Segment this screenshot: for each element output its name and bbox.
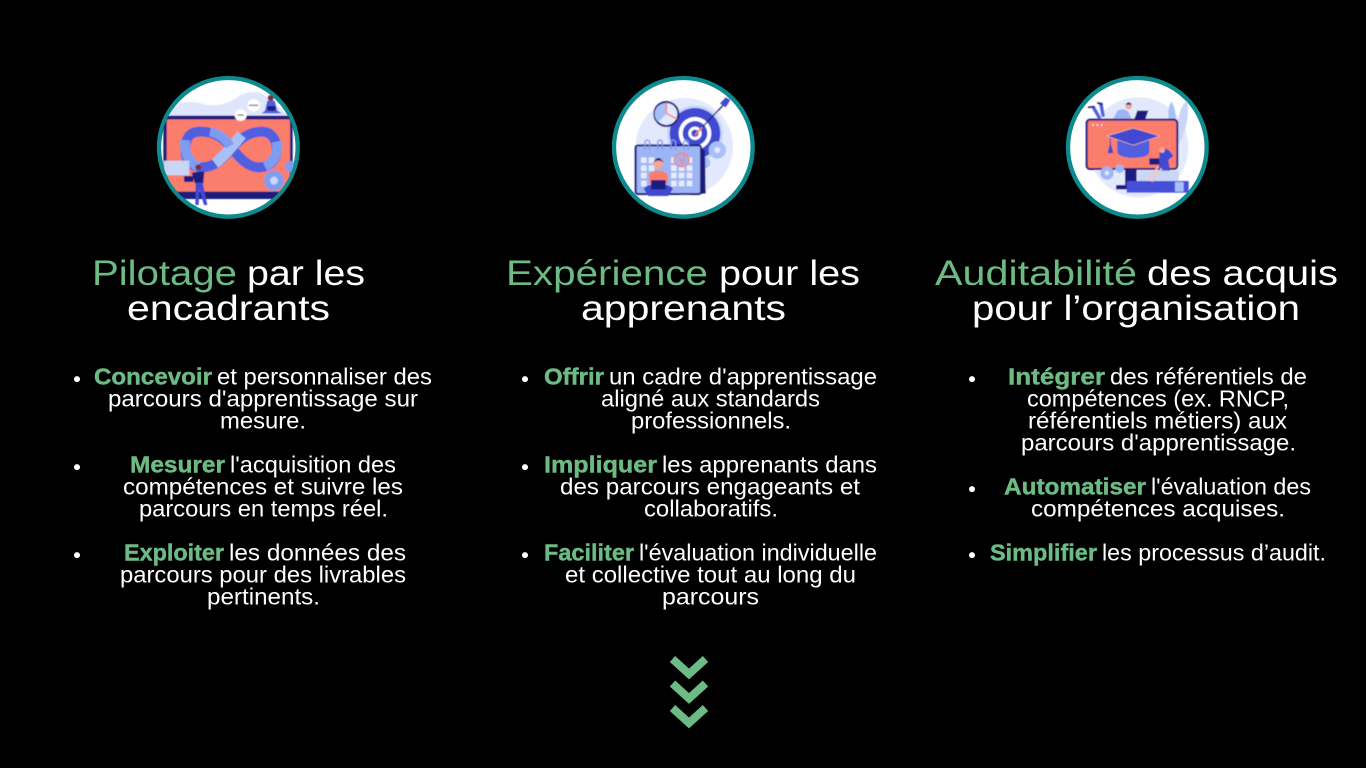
list: expérience pour les apprenants: Impliquer	[544, 452, 657, 478]
heading: Auditabilité des acquis pour l'organisation	[935, 254, 1338, 328]
heading: Expérience pour les apprenants: pour les	[719, 254, 860, 293]
list: expérience pour les apprenants: un cadre d'apprentissage	[609, 364, 877, 390]
list: expérience pour les apprenants: les apprenants dans	[662, 452, 877, 478]
list: auditabilité des acquis: les processus d’audit.	[1102, 540, 1326, 566]
list: auditabilité des acquis: compétences (ex. RNCP,	[1027, 386, 1289, 412]
heading: Expérience pour les apprenants: Expérience	[506, 254, 708, 293]
list: auditabilité des acquis: des référentiels de	[1110, 364, 1307, 390]
list: pilotage par les encadrants: parcours pour des livrables	[120, 562, 406, 588]
list: pilotage par les encadrants: et personnaliser des	[217, 364, 432, 390]
heading: Pilotage par les encadrants: par les	[247, 254, 365, 293]
list: pilotage par les encadrants: Mesurer	[130, 452, 225, 478]
list: expérience pour les apprenants: des parcours engageants et	[560, 474, 860, 500]
list: auditabilité des acquis	[969, 364, 1326, 566]
heading: Pilotage par les encadrants: encadrants	[127, 289, 330, 328]
list: expérience pour les apprenants	[522, 364, 877, 610]
list: pilotage par les encadrants	[74, 364, 432, 610]
list: auditabilité des acquis: parcours d'apprentissage.	[1021, 430, 1296, 456]
icon: calendar and target	[614, 78, 753, 217]
list: expérience pour les apprenants: parcours	[662, 584, 759, 610]
heading: Pilotage par les encadrants	[92, 254, 365, 328]
heading: Expérience pour les apprenants: apprenants	[581, 289, 786, 328]
heading: Pilotage par les encadrants: Pilotage	[92, 254, 237, 293]
list: pilotage par les encadrants: parcours d'apprentissage sur	[108, 386, 418, 412]
heading: Auditabilité des acquis pour l'organisation: Auditabilité	[935, 254, 1137, 293]
arrow: triple chevron down	[672, 659, 706, 723]
heading: Auditabilité des acquis pour l'organisation: des acquis	[1147, 254, 1338, 293]
list: expérience pour les apprenants: professionnels.	[631, 408, 791, 434]
list: expérience pour les apprenants: collaboratifs.	[644, 496, 778, 522]
list: expérience pour les apprenants: Faciliter	[544, 540, 634, 566]
list: pilotage par les encadrants: compétences et suivre les	[123, 474, 403, 500]
list: expérience pour les apprenants: et collective tout au long du	[565, 562, 856, 588]
list: auditabilité des acquis: référentiels métiers) aux	[1028, 408, 1287, 434]
list: pilotage par les encadrants: Concevoir	[94, 364, 212, 390]
list: auditabilité des acquis: Simplifier	[990, 540, 1097, 566]
heading: Auditabilité des acquis pour l'organisation: pour l’organisation	[972, 289, 1300, 328]
list: expérience pour les apprenants: Offrir	[544, 364, 604, 390]
icon: graduation cap on a monitor	[1068, 78, 1207, 217]
list: expérience pour les apprenants: aligné aux standards	[601, 386, 820, 412]
list: pilotage par les encadrants: Exploiter	[124, 540, 224, 566]
list: pilotage par les encadrants: mesure.	[220, 408, 306, 434]
list: expérience pour les apprenants: l'évaluation individuelle	[639, 540, 877, 566]
list: auditabilité des acquis: l'évaluation des	[1151, 474, 1311, 500]
list: auditabilité des acquis: Intégrer	[1008, 364, 1105, 390]
list: auditabilité des acquis: compétences acquises.	[1031, 496, 1285, 522]
list: pilotage par les encadrants: parcours en temps réel.	[139, 496, 388, 522]
icon: infinity loop on a screen	[159, 78, 298, 217]
list: pilotage par les encadrants: pertinents.	[207, 584, 320, 610]
list: auditabilité des acquis: Automatiser	[1004, 474, 1146, 500]
heading: Expérience pour les apprenants	[506, 254, 860, 328]
list: pilotage par les encadrants: les données des	[229, 540, 406, 566]
list: pilotage par les encadrants: l'acquisition des	[230, 452, 396, 478]
